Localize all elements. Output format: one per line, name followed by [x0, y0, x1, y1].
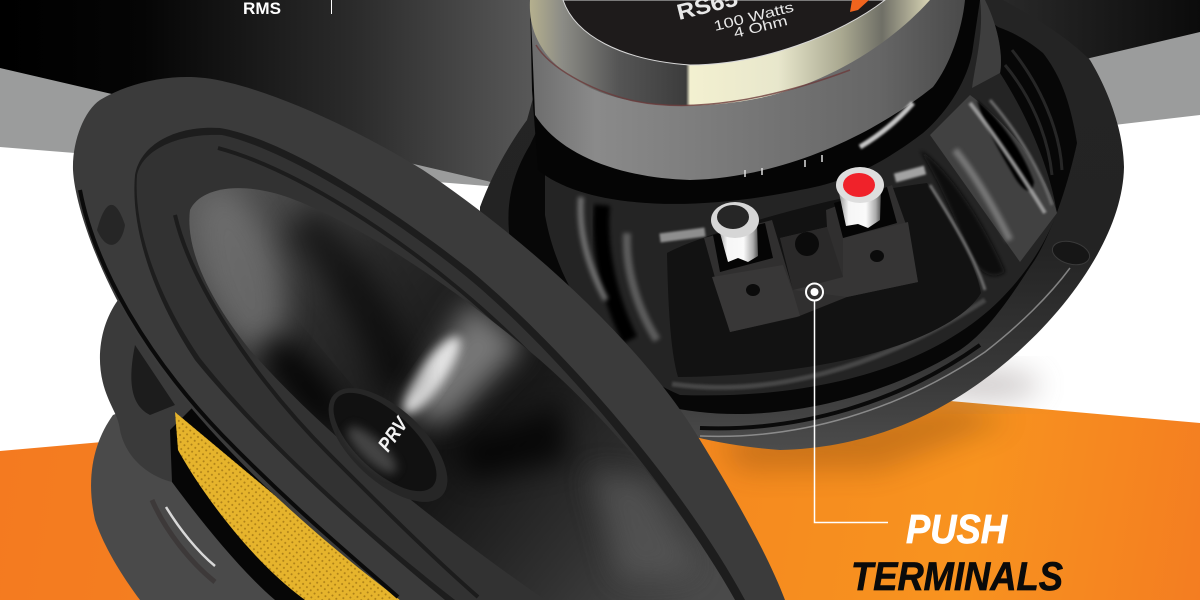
rear speaker: magnet chrome strip — [860, 103, 913, 147]
callout ring — [806, 284, 823, 300]
rear speaker: recess rim highlights — [660, 170, 985, 290]
rib channel upper — [977, 100, 1034, 191]
shadow under rear speaker — [720, 369, 1040, 470]
rear speaker: frame gloss line — [700, 268, 1070, 436]
caption line two: TERMINALS — [851, 555, 1063, 599]
cone bright streak — [395, 330, 469, 420]
cone broad light wedge — [405, 300, 525, 425]
rib bright line upper — [970, 103, 1045, 213]
terminal block — [704, 167, 918, 332]
rear speaker: right basket ribs — [920, 95, 1057, 276]
outer lower basket — [91, 380, 420, 600]
dust cap logo: PRV — [374, 413, 414, 456]
front speaker: frame notch — [97, 205, 125, 245]
left second rib — [627, 233, 657, 340]
cone dark upper sweep — [300, 220, 400, 390]
rear speaker: back plate ring — [530, 0, 980, 204]
cone dark left of cap — [252, 326, 342, 434]
left post — [711, 202, 759, 262]
front speaker: cone — [189, 188, 735, 600]
rear speaker: left basket ribs — [581, 197, 657, 340]
rear speaker: frame inner hole — [508, 0, 1077, 414]
terminal block body — [704, 185, 918, 332]
rear speaker: frame dark line — [700, 345, 980, 428]
caption: rms fragment — [243, 0, 332, 18]
upper basket shadow — [131, 345, 175, 415]
rear speaker: terminal recess — [667, 183, 981, 377]
yellow cone — [175, 412, 400, 600]
cone lower right sheen — [590, 470, 700, 580]
rear speaker: black label disc — [563, 0, 885, 65]
dark ring under highlight — [152, 500, 215, 582]
frame screw — [1050, 237, 1092, 269]
rib lit plate — [930, 95, 1057, 262]
front speaker — [73, 77, 785, 600]
right socket — [834, 187, 897, 238]
right post — [836, 167, 884, 228]
rms label: RMS — [243, 0, 281, 18]
rear speaker: outer frame — [480, 0, 1124, 450]
front speaker: cone highlights — [178, 177, 700, 580]
terminal block right face — [793, 222, 918, 297]
rear speaker: rim edge — [536, 45, 850, 105]
front speaker: ridge — [175, 148, 710, 597]
rear speaker: chrome rim — [530, 0, 930, 106]
silver ring highlight — [166, 507, 215, 566]
rib outer line — [990, 100, 1052, 205]
vertical divider — [331, 0, 332, 14]
caption: push terminals — [851, 506, 1063, 599]
front speaker: foam surround band — [137, 135, 735, 600]
dust cap base — [309, 368, 467, 522]
background: dark gradient top band — [0, 0, 1200, 240]
left bright rib — [581, 197, 606, 300]
upper basket leg — [100, 300, 210, 500]
left socket — [713, 223, 773, 272]
callout: push terminals marker — [806, 284, 888, 522]
terminal block left face — [712, 265, 800, 332]
rib bright line lower — [955, 150, 1010, 240]
front speaker: surround recess — [134, 128, 745, 600]
rear speaker: collar — [972, 0, 1001, 88]
terminal block centre — [780, 227, 843, 290]
background: orange lower band — [0, 398, 1200, 600]
mounting holes — [746, 232, 884, 296]
background: grey angled band — [0, 30, 1200, 186]
cone upper left sheen — [192, 189, 297, 358]
rear speaker — [480, 0, 1124, 450]
front speaker: dust cap — [309, 368, 467, 522]
dust cap dome — [318, 376, 452, 508]
black gloss band — [170, 400, 420, 600]
front speaker: outer frame — [73, 77, 785, 600]
callout dot — [810, 288, 818, 296]
rib channel lower — [920, 150, 1005, 276]
dust cap sheen — [341, 420, 403, 480]
callout leader line — [814, 300, 888, 522]
left dark channel — [601, 205, 630, 340]
label ohm: 4 Ohm — [732, 12, 789, 41]
front speaker rear assembly — [91, 300, 420, 600]
cone dark right of cap — [462, 406, 574, 480]
rear speaker: magnet side — [530, 0, 965, 180]
rear speaker: orange label accent — [850, 0, 869, 12]
rear speaker: recess gloss band — [672, 300, 985, 387]
label watts: 100 Watts — [712, 0, 795, 34]
caption line one: PUSH — [906, 506, 1008, 552]
rear speaker: outer cone arcs — [1005, 50, 1062, 175]
rear speaker: basket body — [545, 0, 1057, 395]
rear speaker: label text — [674, 0, 795, 41]
rear speaker: magnet tick marks — [745, 155, 822, 177]
front speaker: frame lower edge gloss — [80, 190, 398, 597]
